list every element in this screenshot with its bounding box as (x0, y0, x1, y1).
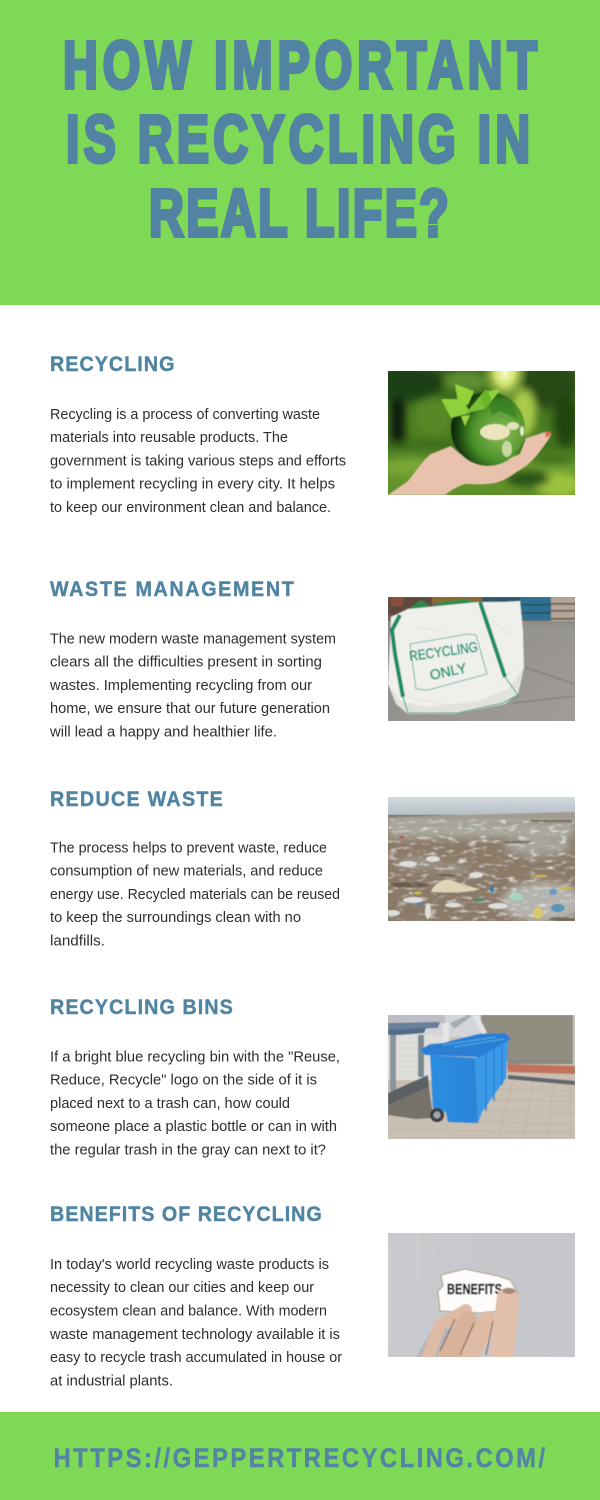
footer band (0, 1412, 600, 1500)
header band (0, 0, 600, 305)
title: HOW IMPORTANT (63, 28, 542, 103)
photo: white recycling only bag (388, 597, 575, 721)
photo: hand holding green globe (388, 371, 575, 495)
text block: recycling bins: Reduce, Recycle" logo on the side of it is (50, 1072, 317, 1088)
photo: hand tearing cardboard to reveal benefits (388, 1233, 575, 1357)
heading: recycling bins: RECYCLING BINS (50, 996, 234, 1019)
text block: recycling bins: If a bright blue recycling bin with the "Reuse, (50, 1050, 340, 1066)
text block: recycling: Recycling is a process of converting waste (50, 407, 320, 423)
title (63, 28, 542, 251)
text block: reduce waste (50, 840, 340, 950)
photo: white recycling only bag: ONLY (428, 659, 468, 683)
heading: reduce waste: REDUCE WASTE (50, 788, 224, 811)
heading: waste management: WASTE MANAGEMENT (50, 578, 295, 601)
photo: plastic litter on beach (388, 797, 575, 921)
text block: recycling bins: someone place a plastic bottle or can in with (50, 1119, 337, 1135)
text block: recycling: to implement recycling in every city. It helps (50, 476, 335, 492)
text block: waste management (49, 632, 336, 740)
text block: waste management: wastes. Implementing recycling from our (49, 678, 312, 694)
heading: recycling: RECYCLING (50, 353, 175, 376)
photo: white recycling only bag: RECYCLING (408, 639, 479, 664)
text block: reduce waste: to keep the surroundings clean with no (50, 910, 301, 926)
footer url: HTTPS://GEPPERTRECYCLING.COM/ (54, 1444, 548, 1473)
text block: waste management: The new modern waste management system (50, 632, 336, 648)
text block: reduce waste: The process helps to prevent waste, reduce (50, 840, 327, 856)
hand (388, 432, 551, 495)
text block: waste management: will lead a happy and healthier life. (49, 724, 277, 740)
text block: recycling: materials into reusable products. The (50, 430, 288, 446)
heading: benefits of recycling: BENEFITS OF RECYCLING (50, 1203, 323, 1226)
text block: benefits of recycling: necessity to clean our cities and keep our (50, 1280, 314, 1296)
text block: benefits of recycling: In today's world recycling waste products is (50, 1257, 329, 1273)
text block: benefits of recycling: easy to recycle trash accumulated in house or (50, 1350, 342, 1366)
text block: recycling bins: placed next to a trash can, how could (50, 1096, 290, 1112)
text block: benefits of recycling: at industrial plants. (50, 1374, 173, 1390)
section: waste management (49, 578, 575, 740)
photo: blue recycling bins (388, 1015, 575, 1139)
text block: benefits of recycling: waste management technology available it is (49, 1327, 340, 1343)
text block: recycling (50, 407, 346, 516)
text block: waste management: home, we ensure that our future generation (50, 701, 330, 717)
section: reduce waste (50, 788, 585, 950)
text block: waste management: clears all the difficulties present in sorting (50, 654, 322, 670)
text block: reduce waste: consumption of new materials, and reduce (50, 864, 323, 880)
litter speckle (388, 819, 575, 921)
text block: recycling: government is taking various steps and efforts (50, 454, 346, 470)
section: recycling (50, 343, 580, 516)
text block: reduce waste: landfills. (50, 934, 105, 950)
photo: hand tearing cardboard to reveal benefits: BENEFITS (447, 1281, 502, 1298)
text block: recycling bins (50, 1050, 340, 1158)
section: recycling bins (50, 996, 575, 1158)
title: IS RECYCLING IN (66, 102, 534, 177)
text block: recycling bins: the regular trash in the gray can next to it? (50, 1142, 326, 1158)
text block: recycling: to keep our environment clean and balance. (50, 500, 331, 516)
text block: benefits of recycling (49, 1257, 342, 1390)
title: REAL LIFE? (149, 176, 451, 251)
text block: reduce waste: energy use. Recycled materials can be reused (50, 887, 340, 903)
text block: benefits of recycling: ecosystem clean and balance. With modern (50, 1304, 327, 1320)
section: benefits of recycling (49, 1203, 575, 1390)
